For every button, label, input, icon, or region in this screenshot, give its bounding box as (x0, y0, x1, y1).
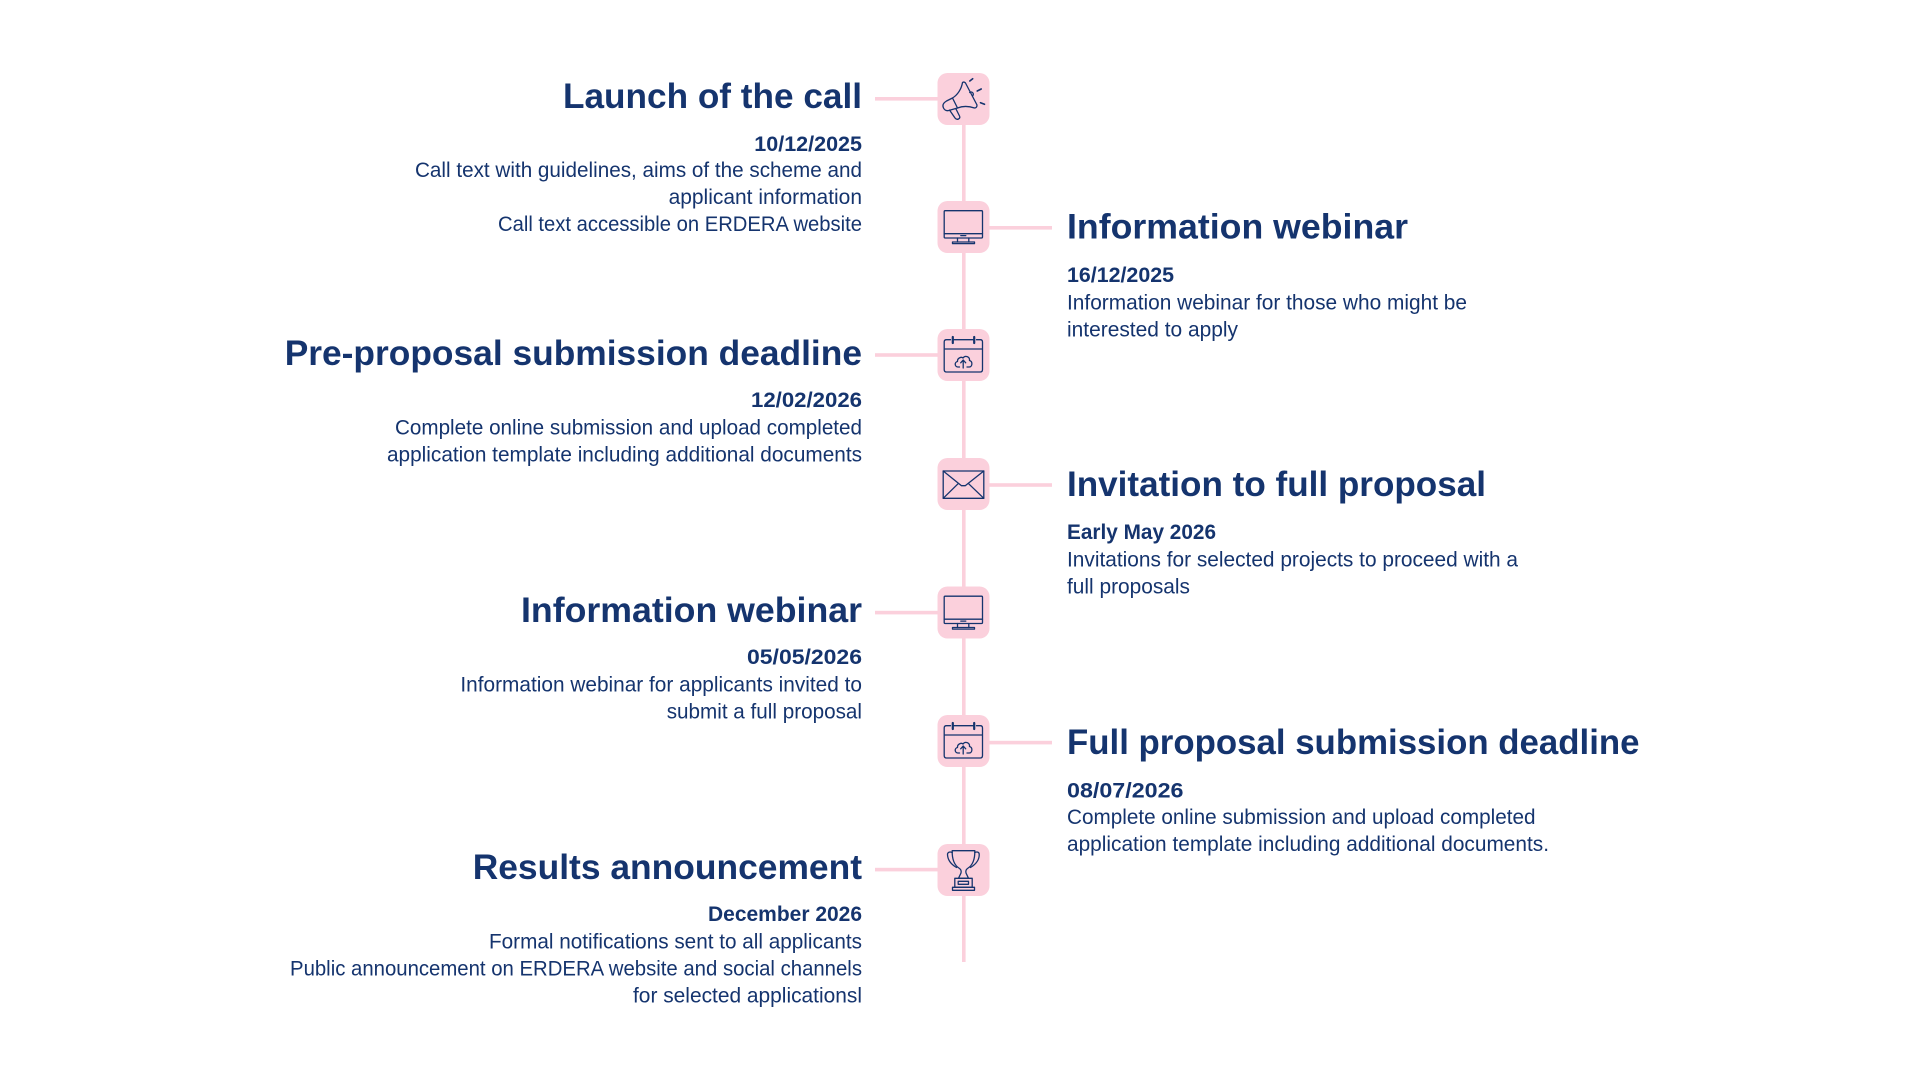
icon: trophy (938, 844, 990, 896)
description: full proposals (1067, 576, 1190, 598)
description: Information webinar for those who might be (1067, 292, 1467, 315)
date: 05/05/2026 (747, 646, 862, 669)
heading: Full proposal submission deadline (1067, 722, 1640, 762)
date: December 2026 (708, 903, 862, 926)
date: Early May 2026 (1067, 521, 1216, 544)
description (415, 159, 862, 236)
icon: calendar upload (938, 715, 990, 767)
description: submit a full proposal (667, 700, 862, 724)
connector (989, 741, 1052, 744)
connector (875, 611, 938, 614)
description (1067, 806, 1549, 856)
date: 16/12/2025 (1067, 264, 1174, 287)
heading: Invitation to full proposal (1067, 464, 1486, 504)
description: applicant information (669, 186, 862, 209)
milestone: full proposal submission deadline (938, 715, 1640, 856)
heading: Pre-proposal submission deadline (285, 333, 862, 373)
description: Invitations for selected projects to proceed with a (1067, 549, 1518, 572)
description: application template including additional documents (387, 443, 862, 466)
heading: Information webinar (521, 590, 862, 630)
connector (875, 353, 938, 357)
icon: monitor (938, 201, 990, 253)
description: interested to apply (1067, 319, 1239, 342)
description: application template including additional documents. (1067, 833, 1549, 856)
description: Complete online submission and upload completed (395, 416, 862, 440)
description: Formal notifications sent to all applicants (489, 931, 862, 954)
description: Call text accessible on ERDERA website (498, 213, 862, 236)
heading: Information webinar (1067, 206, 1408, 246)
milestone: launch of the call (415, 73, 990, 236)
connector (989, 226, 1052, 230)
description: Information webinar for applicants invited to (460, 674, 862, 696)
icon: calendar upload (938, 329, 990, 381)
milestone: information webinar May (460, 586, 989, 724)
description: for selected applicationsl (633, 984, 862, 1008)
description: Call text with guidelines, aims of the scheme and (415, 159, 862, 182)
description (1067, 292, 1467, 342)
connector (875, 868, 938, 871)
description (460, 674, 862, 724)
milestone: results announcement (290, 844, 990, 1008)
icon: envelope (938, 458, 990, 510)
description (290, 931, 862, 1008)
timeline spine (962, 99, 966, 962)
description (1067, 549, 1518, 598)
connector (989, 483, 1052, 487)
heading: Results announcement (473, 847, 862, 887)
milestone: information webinar December (938, 201, 1467, 342)
connector (875, 97, 938, 101)
description: Public announcement on ERDERA website and social channels (290, 958, 862, 981)
date: 12/02/2026 (751, 389, 862, 412)
milestone: invitation to full proposal (938, 458, 1518, 598)
date: 10/12/2025 (754, 133, 862, 156)
heading: Launch of the call (563, 76, 862, 116)
milestone: pre-proposal submission deadline (285, 329, 990, 466)
icon: megaphone (938, 73, 990, 125)
description (387, 416, 862, 466)
date: 08/07/2026 (1067, 779, 1184, 802)
description: Complete online submission and upload completed (1067, 806, 1536, 829)
icon: monitor (938, 586, 990, 638)
